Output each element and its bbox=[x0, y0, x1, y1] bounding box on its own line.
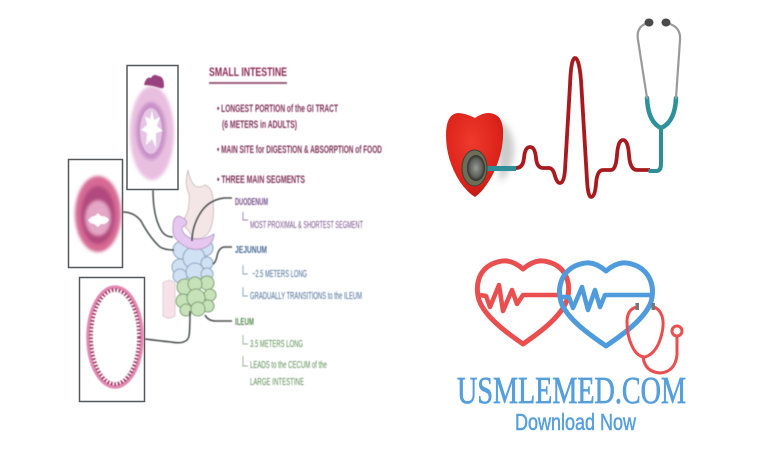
anatomy: stomach bbox=[175, 170, 214, 240]
segment: ileum notes: LARGE INTESTINE bbox=[250, 377, 304, 388]
icon: blue heart bbox=[560, 263, 652, 346]
download label: Download Now bbox=[515, 409, 636, 435]
segment: ileum notes bbox=[235, 316, 327, 388]
histology box: jejunum cross-section bbox=[68, 160, 122, 268]
icon: red stethoscope bbox=[627, 303, 682, 373]
heading: small intestine: SMALL INTESTINE bbox=[209, 65, 287, 79]
icon: blue ECG trace bbox=[562, 287, 650, 310]
panel: notes text bbox=[209, 65, 382, 388]
histology box: duodenum cross-section bbox=[127, 66, 178, 190]
anatomy: ileum bbox=[176, 276, 216, 316]
segment: duodenum notes: DUODENUM bbox=[235, 196, 268, 208]
icon: red heart bbox=[446, 113, 503, 197]
icon: red ECG trace bbox=[480, 285, 560, 311]
icon: heart shadow bbox=[495, 118, 514, 182]
bullet list bbox=[217, 103, 382, 186]
icon: chest piece bbox=[462, 150, 487, 186]
bullet list: • THREE MAIN SEGMENTS bbox=[217, 174, 305, 186]
anatomy: large intestine bbox=[163, 280, 175, 318]
panel: histology and anatomy illustration bbox=[68, 66, 232, 402]
icon: ear tips bbox=[644, 18, 670, 26]
anatomy: duodenum bbox=[173, 216, 214, 249]
segment: duodenum notes bbox=[235, 196, 363, 231]
segment: ileum notes: 3.5 METERS LONG bbox=[250, 339, 303, 350]
segment: jejunum notes: ~2.5 METERS LONG bbox=[252, 269, 307, 280]
logo wordmark: USMLEMED.COM bbox=[457, 370, 686, 412]
segment: jejunum notes bbox=[235, 244, 362, 302]
heading: small intestine bbox=[209, 65, 287, 84]
stethoscope tubing bbox=[486, 24, 680, 171]
segment: duodenum notes: MOST PROXIMAL & SHORTEST SEGMENT bbox=[250, 220, 363, 231]
bullet list: (6 METERS in ADULTS) bbox=[222, 119, 297, 131]
icon: red heart with stethoscope ECG bbox=[446, 18, 680, 197]
anatomy: jejunum bbox=[172, 240, 213, 283]
leader lines bbox=[123, 190, 232, 343]
histology box: ileum cross-section bbox=[80, 278, 144, 402]
segment: jejunum notes: GRADUALLY TRANSITIONS to the ILEUM bbox=[250, 291, 362, 302]
segment: ileum notes: LEADS to the CECUM of the bbox=[250, 360, 327, 371]
bullet list: • LONGEST PORTION of the GI TRACT bbox=[217, 103, 338, 115]
icon: red heart bbox=[477, 261, 569, 344]
logo: USMLEMED bbox=[457, 261, 686, 435]
segment: jejunum notes: JEJUNUM bbox=[235, 244, 267, 256]
segment: ileum notes: ILEUM bbox=[235, 316, 254, 328]
bullet list: • MAIN SITE for DIGESTION & ABSORPTION of FOOD bbox=[217, 144, 382, 156]
ECG line bbox=[516, 58, 650, 197]
